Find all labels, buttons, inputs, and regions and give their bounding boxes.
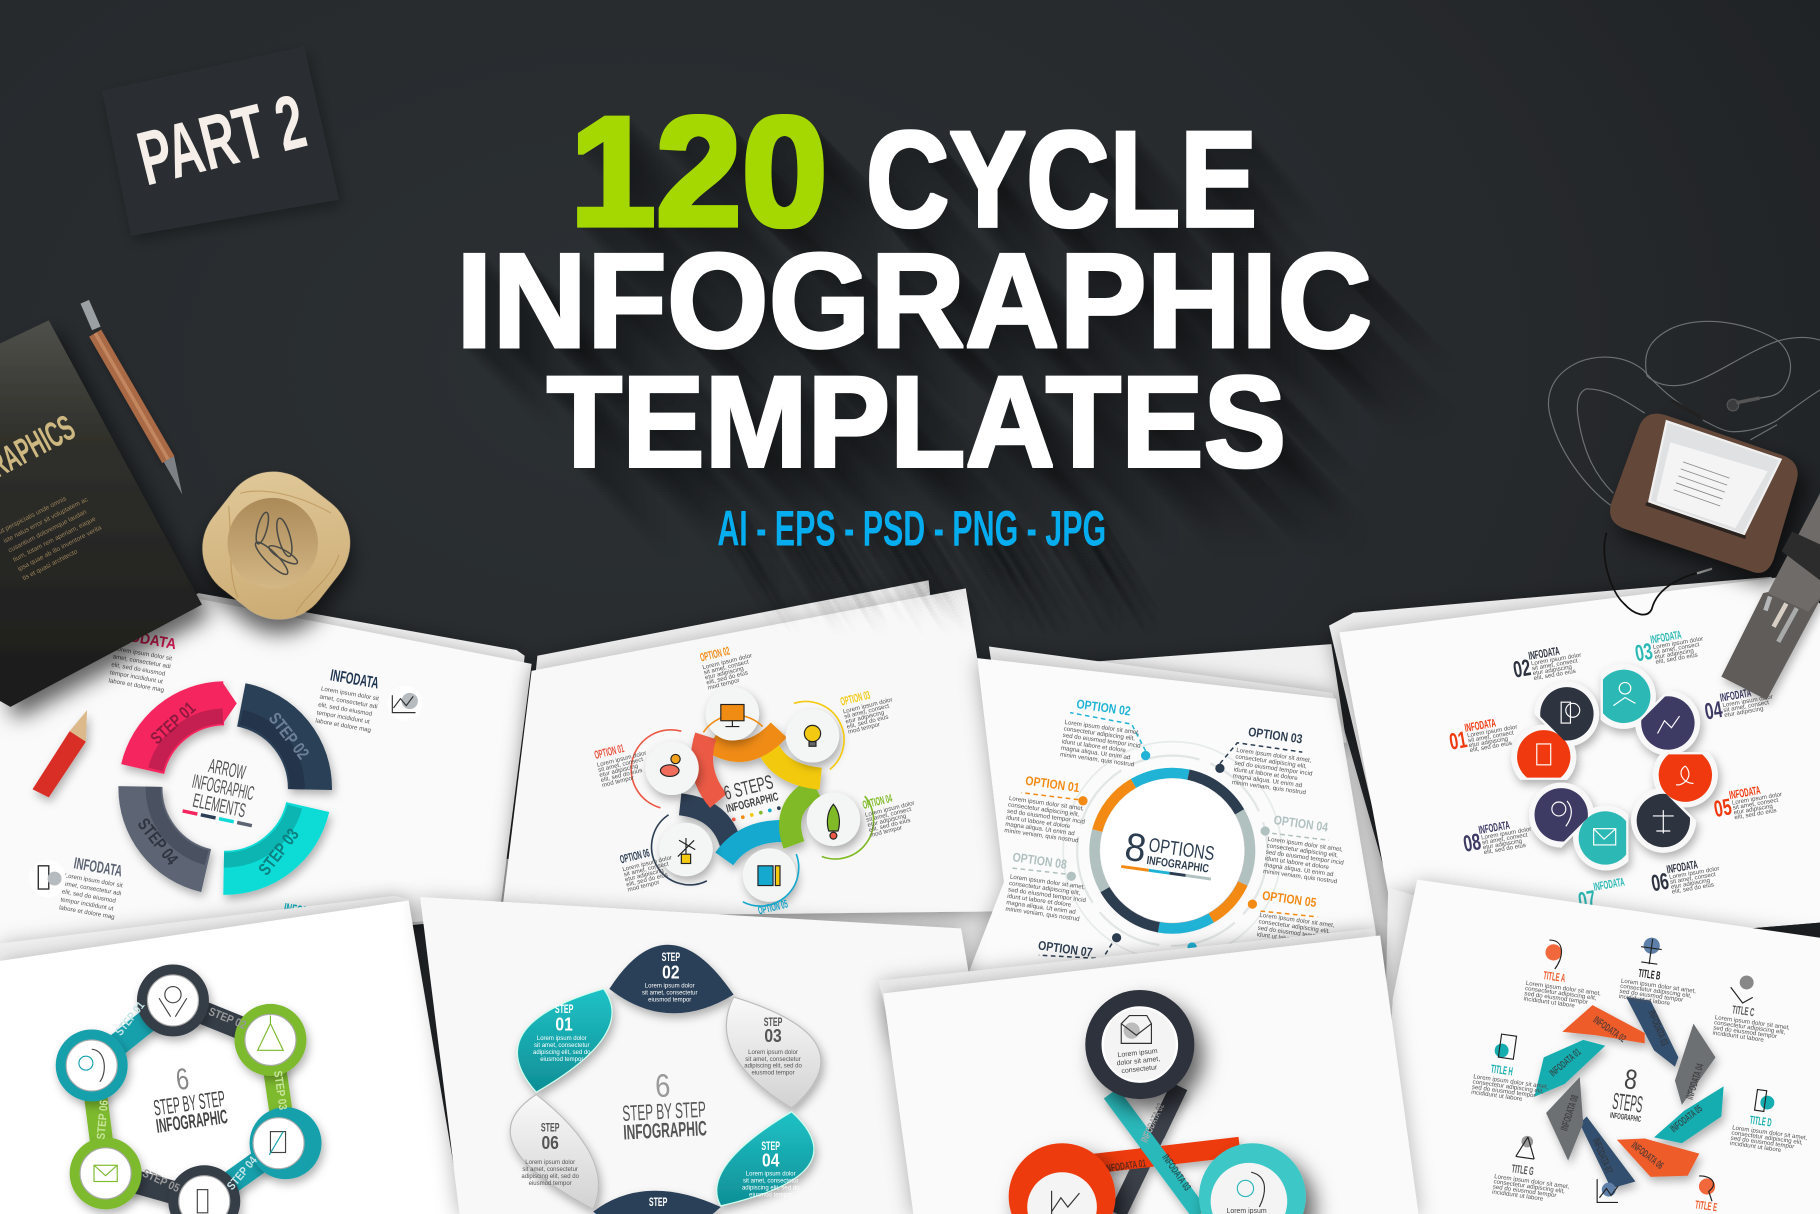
infodata labels with numbers: sit amet, consect: [1468, 729, 1514, 744]
option labels and paragraphs: sit amet, consect: [623, 860, 670, 878]
book paragraph: tium, totam rem aperiam, eaque: [12, 515, 97, 564]
option headings and paragraphs: Lorem ipsum dolor sit amet,: [1009, 873, 1086, 891]
title block: 120: [570, 84, 828, 258]
infodata labels with numbers: 07: [1576, 885, 1598, 914]
eight truncated circles: [1511, 664, 1718, 870]
option headings and paragraphs: sed do eiusmod tempor incid: [1234, 760, 1313, 778]
title labels with icons: Lorem ipsum dolor sit amet,: [1494, 1173, 1570, 1191]
option labels and paragraphs: OPTION 06: [619, 846, 651, 866]
title labels with icons: Lorem ipsum dolor sit amet,: [1620, 978, 1697, 995]
ribbon labels: INFODATA 01: [1548, 1047, 1583, 1079]
icon: felt pen pouch: [1721, 493, 1820, 700]
three large discs: Lorem ipsum: [1117, 1048, 1158, 1059]
petal step text: sit amet, consectetur: [743, 1179, 798, 1185]
infodata labels with numbers: 08: [1461, 828, 1483, 857]
option headings and paragraphs: OPTION 03: [1247, 724, 1303, 746]
petal step text: 02: [662, 961, 680, 982]
infodata text: gray: labore et dolore mag: [58, 904, 116, 921]
infodata labels with numbers: 04: [1703, 696, 1724, 725]
infodata text: pink: elit, sed do eiusmod: [111, 661, 166, 678]
crossed ribbons: [1050, 1086, 1240, 1214]
title labels with icons: Lorem ipsum dolor sit amet,: [1525, 980, 1602, 997]
panel: eight step arrows sheet: [1381, 880, 1820, 1214]
option headings and paragraphs: magna aliqua. Ut enim ad: [1005, 821, 1076, 837]
option labels and paragraphs: Lorem ipsum dolor: [622, 854, 673, 873]
ribbon labels: INFODATA 04: [1685, 1062, 1707, 1101]
infodata text: gray: INFODATA: [72, 854, 124, 881]
petal step text: 04: [762, 1149, 780, 1170]
infodata text: navy: elit, sed do eiusmod: [318, 701, 373, 718]
infodata labels with numbers: sit amet, consect: [1670, 871, 1716, 886]
infodata labels with numbers: INFODATA: [1666, 858, 1699, 876]
petal step text: Lorem ipsum dolor: [525, 1160, 575, 1166]
petal step text: adipiscing elit, sed do: [533, 1050, 591, 1056]
infodata labels with numbers: sit amet, consect: [1732, 797, 1779, 812]
eight steps centre title: [1609, 1062, 1649, 1124]
petal step text: Lorem ipsum dolor: [748, 1050, 798, 1056]
book paragraph: iste natus error sit voluptatem ac: [2, 496, 90, 545]
infodata labels with numbers: elit, sed do eius: [1533, 668, 1576, 682]
title labels with icons: sed do eiusmod tempor: [1619, 988, 1684, 1004]
title labels with icons: Lorem ipsum dolor sit amet,: [1732, 1124, 1808, 1142]
infodata labels with numbers: elit, sed do eius: [1483, 842, 1526, 856]
title labels with icons: TITLE C: [1731, 1003, 1755, 1019]
icon: chart badge: [388, 686, 422, 721]
infodata labels with numbers: INFODATA: [1593, 876, 1626, 894]
infodata text: gray: [58, 853, 127, 921]
option labels and paragraphs: sit amet, consect: [844, 703, 890, 721]
title word: templates: TEMPLATES: [547, 349, 1286, 495]
ribbon labels: INFODATA 05: [1669, 1104, 1705, 1135]
dark gap between sheets: [1749, 923, 1820, 939]
ring chart with eight segments: [1063, 742, 1281, 960]
ribbon labels: INFODATA 07: [1590, 1137, 1614, 1175]
option headings and paragraphs: idunt ut labore et dolore: [1264, 855, 1330, 871]
option headings and paragraphs: idunt ut labore et dolore: [1256, 931, 1322, 947]
chain step labels: STEP 04: [224, 1154, 260, 1193]
icon: chess badge: [29, 860, 66, 897]
petal step text: STEP: [649, 1196, 668, 1209]
infodata labels with numbers: Lorem ipsum dolor: [1731, 791, 1783, 807]
infodata text: pink: amet, consectetur adi: [112, 653, 171, 670]
option headings and paragraphs: minim veniam, quis nostrud: [1004, 827, 1079, 845]
option headings and paragraphs: idunt ut labore et dolore: [1233, 766, 1299, 782]
option headings and paragraphs: minim veniam, quis nostrud: [1263, 868, 1338, 885]
petal step text: STEP: [555, 1003, 574, 1016]
infodata labels with numbers: sit amet, consect: [1531, 657, 1578, 672]
hexagonal link chain: [92, 1000, 286, 1201]
infodata text: navy: amet, consectetur adi: [319, 693, 378, 711]
six step ring centre title: INFOGRAPHIC: [155, 1106, 229, 1138]
petal step text: eiusmod tempor: [648, 998, 691, 1004]
book paragraph: cusantium doloremque laudan: [7, 508, 88, 554]
petal step text: sit amet, consectetur: [522, 1167, 578, 1173]
infodata labels with numbers: sit amet, consect: [1653, 641, 1700, 656]
petal step text: sit amet, consectetur: [534, 1043, 590, 1049]
option labels and paragraphs: etur adipiscing: [624, 867, 665, 883]
twisted petal centre title: [620, 1066, 707, 1145]
step labels: STEP 02: [265, 709, 313, 763]
infodata text: gray: tempor incididunt ut: [60, 896, 114, 913]
title labels with icons: consectetur adipiscing elit,: [1472, 1078, 1545, 1095]
ribbon labels: INFODATA 02: [1591, 1015, 1628, 1045]
infodata text: navy: INFODATA: [329, 666, 380, 693]
option labels and paragraphs: OPTION 05: [757, 897, 789, 917]
option headings and paragraphs: magna aliqua. Ut enim ad: [1264, 862, 1334, 878]
infodata labels with numbers: etur adipiscing: [1532, 663, 1573, 677]
panel: eight step arrows sheet: STEPS: [1611, 1088, 1644, 1118]
title labels with icons: sed do eiusmod tempor: [1730, 1135, 1795, 1151]
six coloured ribbon ring: [680, 730, 821, 859]
option headings and paragraphs: OPTION 05: [1261, 888, 1317, 910]
petal step text: adipiscing elit, sed do: [521, 1174, 580, 1180]
eight options centre title: OPTIONS: [1147, 834, 1216, 865]
option headings and paragraphs: Lorem ipsum dolor sit amet,: [1236, 747, 1312, 764]
infodata labels with numbers: elit, sed do eius: [1734, 807, 1777, 821]
infodata labels with numbers: etur adipiscing: [1482, 837, 1523, 851]
title labels with icons: consectetur adipiscing elit,: [1525, 985, 1597, 1002]
title labels with icons: sed do eiusmod tempor: [1492, 1183, 1557, 1199]
option headings and paragraphs: OPTION 01: [1024, 773, 1081, 795]
option headings and paragraphs: consectetur adipiscing elit,: [1266, 842, 1339, 859]
infodata text: navy: tempor incididunt ut: [316, 709, 370, 726]
petal step text: STEP: [764, 1016, 782, 1029]
infodata labels with numbers: 02: [1511, 654, 1533, 683]
part 2 text: PART 2: [130, 79, 314, 202]
option headings and paragraphs: minim veniam, quis nostrud: [1060, 751, 1135, 769]
card: part 2 label: [102, 46, 339, 236]
title block: [456, 84, 1372, 556]
petal step text: sit amet, consectetur: [745, 1057, 801, 1063]
infodata labels with numbers: elit, sed do eius: [1469, 740, 1513, 754]
infodata labels with numbers: INFODATA: [1478, 819, 1511, 837]
title word: cycle: CYCLE: [866, 103, 1257, 256]
six steps centre title: [720, 771, 782, 822]
option headings and paragraphs: consectetur adipiscing elit,: [1235, 753, 1308, 770]
petal step text: eiusmod tempor: [540, 1057, 583, 1063]
chain step labels: STEP 01: [113, 999, 148, 1038]
infodata labels with numbers: sit amet, consect: [1481, 831, 1528, 846]
petal step text: STEP: [662, 951, 680, 964]
icon: mechanical pen: [85, 302, 182, 494]
infodata text: navy: Lorem ipsum dolor sit: [320, 685, 380, 703]
arrow centre title: ELEMENTS: [191, 790, 248, 822]
ribbon labels: INFODATA 03: [1645, 1009, 1670, 1048]
option labels and paragraphs: Lorem ipsum dolor: [702, 652, 753, 671]
title labels with icons: TITLE G: [1511, 1162, 1534, 1178]
infodata labels with numbers: Lorem ipsum dolor: [1652, 635, 1704, 651]
option headings and paragraphs: sed do eiusmod tempor incid: [1257, 925, 1336, 943]
eight steps centre title: 8: [1622, 1063, 1639, 1096]
option labels and paragraphs: Lorem ipsum dolor: [864, 800, 915, 819]
icon: red pencil: [32, 710, 87, 797]
option headings and paragraphs: idunt ut labore et dolore: [1007, 893, 1072, 909]
option labels and paragraphs: mod tempor: [707, 677, 740, 692]
infodata labels with numbers: INFODATA: [1464, 717, 1497, 735]
option headings and paragraphs: sed do eiusmod tempor incid: [1008, 886, 1087, 904]
option headings and paragraphs: Lorem ipsum dolor sit amet,: [1008, 795, 1085, 812]
eight options centre title: INFOGRAPHIC: [1146, 854, 1210, 876]
option headings and paragraphs: consectetur adipiscing elit,: [1008, 801, 1080, 818]
infodata labels with numbers: 06: [1649, 868, 1671, 896]
title labels with icons: consectetur adipiscing elit,: [1731, 1129, 1804, 1146]
chain step labels: STEP 03: [271, 1070, 289, 1111]
option labels and paragraphs: elit, sed do eius: [626, 871, 669, 889]
infodata labels with numbers: 05: [1712, 793, 1734, 822]
icon: wooden stand with phone: [1610, 414, 1798, 573]
option labels and paragraphs: sit amet, consect: [597, 756, 644, 774]
six twisted petals: [510, 945, 821, 1214]
chain step labels: [95, 999, 289, 1195]
six step ring centre title: 6: [174, 1063, 191, 1097]
option headings and paragraphs: OPTION 08: [1012, 849, 1068, 872]
infodata text: pink: labore et dolore mag: [108, 677, 165, 694]
infodata labels with numbers: INFODATA: [1719, 686, 1752, 705]
option headings and paragraphs: [1004, 695, 1350, 960]
title labels with icons: TITLE A: [1542, 969, 1566, 985]
option headings and paragraphs: minim veniam, quis nostrud: [1231, 779, 1307, 796]
book paragraph: ipsa quae ab illo inventore verita: [17, 524, 103, 573]
eight ribbon arrows: [1534, 997, 1724, 1188]
eight options centre title: [1121, 825, 1217, 881]
option labels and paragraphs: OPTION 01: [593, 742, 626, 762]
petal step text: 01: [555, 1014, 573, 1035]
option labels and paragraphs: OPTION 04: [861, 792, 894, 812]
option headings and paragraphs: sed do eiusmod tempor incid: [1062, 732, 1142, 750]
option labels and paragraphs: [593, 640, 920, 917]
petal step text: Lorem ipsum dolor: [645, 984, 695, 990]
panel: eight options sheet: [959, 644, 1387, 998]
arrow centre title: [182, 752, 264, 827]
infodata labels with numbers: etur adipiscing: [1654, 647, 1695, 661]
infodata labels with numbers: etur adipiscing: [1670, 877, 1711, 891]
arrow centre title: INFOGRAPHIC: [190, 771, 256, 805]
petal step text: 03: [764, 1025, 782, 1046]
panel: six steps sheet: [501, 580, 1019, 917]
infodata labels with numbers: 01: [1447, 726, 1469, 755]
petal step text: sit amet, consectetur: [642, 991, 697, 997]
six steps centre title: INFOGRAPHIC: [725, 790, 780, 816]
option headings and paragraphs: sed do eiusmod tempor incid: [1265, 849, 1345, 867]
infodata labels with numbers: elit, sed do eius: [1671, 881, 1715, 896]
step labels: STEP 01: [146, 697, 200, 748]
option headings and paragraphs: OPTION 04: [1273, 812, 1330, 835]
infodata text: navy: [315, 665, 383, 735]
title labels with icons: TITLE B: [1638, 967, 1661, 983]
infodata labels with numbers: Lorem ipsum dolor: [1531, 652, 1582, 667]
three large discs: [1009, 990, 1306, 1214]
ribbon labels: INFODATA 03: [1159, 1153, 1192, 1193]
icon: notebook: [0, 320, 202, 707]
panel: six step ring sheet: STEP BY STEP: [152, 1086, 227, 1121]
ribbon labels: INFODATA 08: [1559, 1094, 1581, 1133]
title labels with icons: consectetur adipiscing elit,: [1620, 983, 1692, 1000]
title labels with icons: consectetur adipiscing elit,: [1714, 1019, 1786, 1036]
option labels and paragraphs: OPTION 02: [699, 645, 731, 664]
petal step text: adipiscing elit, sed do: [742, 1186, 800, 1192]
option nodes and dashes: [1012, 713, 1329, 959]
infodata labels with numbers: etur adipiscing: [1468, 735, 1509, 749]
option headings and paragraphs: minim veniam, quis nostrud: [1005, 906, 1080, 923]
panel: eight teardrop sheet: [1329, 577, 1820, 939]
twisted petal centre title: INFOGRAPHIC: [623, 1117, 707, 1145]
title labels with icons: Lorem ipsum dolor sit amet,: [1714, 1014, 1791, 1032]
infodata text: gray: Lorem ipsum dolor sit: [64, 872, 123, 889]
petal step text: eiusmod tempor: [749, 1193, 792, 1199]
infodata text: pink: INFODATA: [106, 624, 178, 653]
infodata text: pink: tempor incididunt ut: [109, 669, 164, 686]
ring of four step arrows: [140, 703, 310, 873]
ribbon labels: [1548, 1009, 1707, 1175]
infodata labels with numbers: [1447, 625, 1785, 914]
option labels and paragraphs: mod tempor: [869, 824, 903, 839]
infodata text: navy: labore et dolore mag: [315, 717, 372, 734]
petal step text: STEP: [761, 1140, 780, 1153]
title labels with icons: incididunt ut labore: [1471, 1089, 1523, 1103]
infodata text: gray: elit, sed do eiusmod: [61, 888, 117, 905]
icon: wooden bowl with paperclips: [182, 451, 371, 640]
ribbon labels: INFODATA 02: [1140, 1102, 1167, 1144]
title labels with icons: [1471, 934, 1813, 1214]
option headings and paragraphs: idunt ut labore et dolore: [1006, 814, 1071, 830]
option headings and paragraphs: Lorem ipsum dolor sit amet,: [1064, 719, 1140, 736]
infodata labels with numbers: Lorem ipsum dolor: [1481, 826, 1532, 841]
option labels and paragraphs: etur adipiscing: [845, 709, 885, 726]
option labels and paragraphs: etur adipiscing: [704, 665, 745, 682]
option headings and paragraphs: Lorem ipsum dolor sit amet,: [1267, 836, 1343, 853]
title labels with icons: incididunt ut labore: [1523, 995, 1576, 1010]
title word: infographic: INFOGRAPHIC: [456, 225, 1372, 376]
option labels and paragraphs: mod tempor: [627, 879, 660, 894]
option headings and paragraphs: sed do eiusmod tempor incid: [1007, 808, 1086, 826]
infodata labels with numbers: Lorem ipsum dolor: [1722, 693, 1773, 709]
arrow centre title: ARROW: [207, 755, 248, 784]
title labels with icons: Lorem ipsum dolor sit amet,: [1473, 1073, 1549, 1091]
option headings and paragraphs: Lorem ipsum dolor sit amet,: [1259, 912, 1335, 929]
title labels with icons: incididunt ut labore: [1492, 1189, 1544, 1203]
infodata labels with numbers: sit amet, consect: [1723, 699, 1770, 714]
panel: twisted six petal sheet: [420, 897, 1010, 1214]
option labels and paragraphs: Lorem ipsum dolor: [842, 696, 893, 715]
six node discs with icons: [56, 964, 322, 1214]
petal step text: adipiscing elit, sed do: [744, 1064, 802, 1070]
three large discs: dolor sit amet,: [1116, 1056, 1161, 1067]
title labels with icons: incididunt ut labore: [1618, 993, 1671, 1007]
infodata labels with numbers: INFODATA: [1728, 784, 1762, 802]
option headings and paragraphs: OPTION 07: [1037, 937, 1093, 960]
icon: earphone cables: [1548, 321, 1820, 615]
option labels and paragraphs: OPTION 03: [839, 689, 872, 709]
option headings and paragraphs: magna aliqua. Ut enim ad: [1232, 773, 1303, 789]
panel: arrow infographic sheet: [0, 593, 532, 963]
option headings and paragraphs: idunt ut labore et dolore: [1061, 738, 1127, 754]
option headings and paragraphs: magna aliqua. Ut enim ad: [1060, 745, 1131, 761]
infodata labels with numbers: Lorem ipsum dolor: [1669, 865, 1720, 881]
title labels with icons: incididunt ut labore: [1712, 1030, 1765, 1044]
infodata labels with numbers: elit, sed do eius: [1655, 652, 1698, 666]
infodata text: pink: Lorem ipsum dolor sit: [114, 645, 173, 662]
ribbon labels: INFODATA 01: [1104, 1158, 1147, 1175]
petal step text: [521, 951, 802, 1209]
infodata labels with numbers: etur adipiscing: [1724, 705, 1765, 719]
infodata text: cut-off teal: INFODATA: [283, 899, 324, 922]
step labels: [134, 697, 313, 879]
six node circles with arc arrows and icons: [645, 687, 860, 902]
twisted petal centre title: STEP BY STEP: [622, 1097, 706, 1126]
eight steps centre title: INFOGRAPHIC: [1609, 1111, 1642, 1124]
panel: six step ring sheet: [0, 896, 462, 1214]
option headings and paragraphs: OPTION 02: [1076, 696, 1132, 719]
option labels and paragraphs: mod tempor: [601, 774, 635, 789]
chain step labels: STEP 05: [140, 1167, 182, 1195]
petal step text: eiusmod tempor: [751, 1071, 795, 1077]
option headings and paragraphs: consectetur adipiscing elit,: [1009, 880, 1081, 897]
infodata text: pink: [99, 624, 178, 695]
option labels and paragraphs: etur adipiscing: [867, 812, 908, 829]
infodata labels with numbers: INFODATA: [1528, 645, 1561, 663]
option labels and paragraphs: elit, sed do eius: [706, 669, 749, 687]
option labels and paragraphs: mod tempor: [847, 721, 881, 736]
eight options centre title: 8: [1122, 825, 1149, 871]
file format line: AI - EPS - PSD - PNG - JPG: [717, 500, 1106, 556]
title labels with icons: sed do eiusmod tempor: [1713, 1024, 1777, 1040]
infodata labels with numbers: Lorem ipsum dolor: [1467, 724, 1518, 739]
option headings and paragraphs: magna aliqua. Ut enim ad: [1006, 899, 1077, 916]
infodata labels with numbers: INFODATA: [1649, 628, 1683, 647]
title labels with icons: sed do eiusmod tempor: [1471, 1084, 1536, 1099]
title labels with icons: incididunt ut labore: [1730, 1140, 1782, 1154]
petal step text: STEP: [541, 1122, 560, 1135]
option labels and paragraphs: etur adipiscing: [599, 762, 639, 779]
step labels: STEP 03: [254, 824, 303, 879]
petal step text: eiusmod tempor: [529, 1181, 572, 1187]
book paragraph: tis et quasi architecto: [21, 548, 79, 582]
option labels and paragraphs: sit amet, consect: [866, 806, 912, 824]
infodata labels with numbers: etur adipiscing: [1733, 803, 1774, 817]
petal step text: Lorem ipsum dolor: [537, 1036, 587, 1042]
step labels: STEP 04: [134, 814, 182, 869]
option labels and paragraphs: elit, sed do eius: [600, 767, 643, 784]
three large discs: consectetur: [1121, 1064, 1158, 1075]
title labels with icons: sed do eiusmod tempor: [1524, 990, 1588, 1006]
twisted petal centre title: 6: [654, 1067, 671, 1104]
title labels with icons: TITLE H: [1490, 1063, 1514, 1078]
panel: three ring knot sheet: [879, 928, 1418, 1214]
option labels and paragraphs: elit, sed do eius: [846, 714, 889, 731]
petal step text: Lorem ipsum dolor: [746, 1172, 796, 1178]
infodata labels with numbers: 03: [1633, 638, 1655, 666]
six steps centre title: 6 STEPS: [722, 771, 776, 805]
chain step labels: STEP 02: [207, 1005, 248, 1032]
option headings and paragraphs: consectetur adipiscing elit,: [1258, 918, 1331, 935]
title labels with icons: TITLE D: [1749, 1114, 1772, 1130]
infodata text: gray: amet, consectetur adi: [63, 880, 122, 897]
option labels and paragraphs: elit, sed do eius: [868, 817, 911, 834]
petal step text: 06: [541, 1132, 559, 1153]
ribbon labels: INFODATA 06: [1629, 1140, 1665, 1172]
option labels and paragraphs: sit amet, consect: [703, 658, 750, 676]
ribbon labels: [1104, 1102, 1192, 1193]
lower light underlay of stacked sheets: [464, 696, 1404, 1214]
option labels and paragraphs: Lorem ipsum dolor: [596, 750, 647, 769]
title labels with icons: consectetur adipiscing elit,: [1493, 1178, 1566, 1195]
chain step labels: STEP 06: [95, 1099, 111, 1140]
six step ring centre title: [148, 1058, 229, 1138]
option headings and paragraphs: consectetur adipiscing elit,: [1063, 725, 1136, 742]
